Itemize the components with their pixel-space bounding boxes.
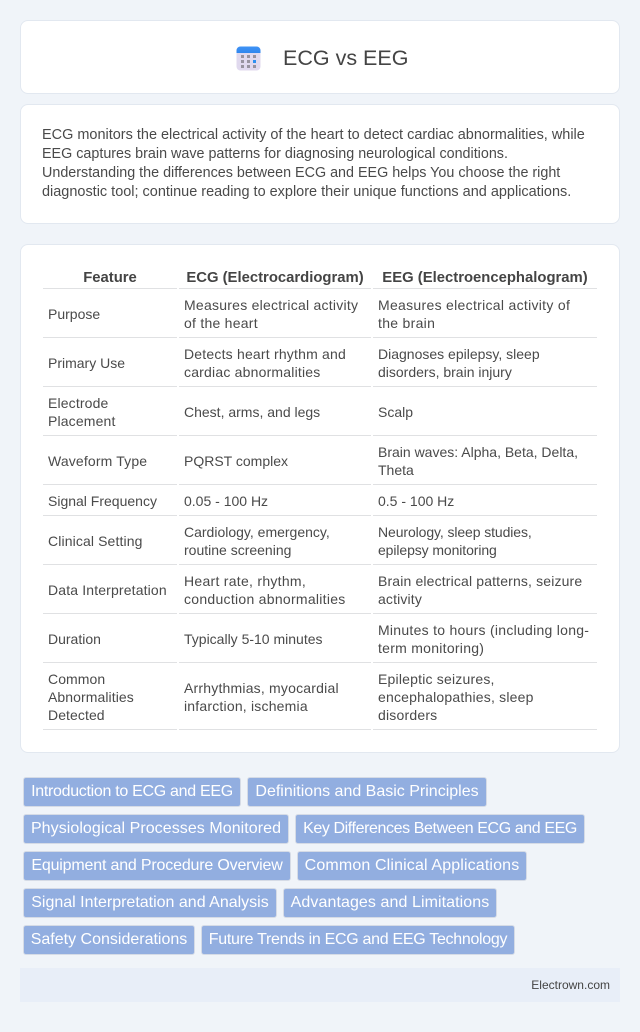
tag: Safety Considerations (31, 931, 187, 948)
comparison table card (20, 244, 620, 753)
row: common abnormalities: encephalopathies, sleep (378, 689, 534, 705)
tag (23, 925, 195, 955)
tag (23, 888, 277, 918)
row: purpose: Purpose (48, 306, 100, 322)
row: duration: Typically 5-10 minutes (184, 631, 323, 647)
row: primary use: Diagnoses epilepsy, sleep (378, 346, 540, 362)
intro card (20, 104, 620, 224)
table header: EEG (Electroencephalogram) (382, 270, 588, 286)
row: purpose: of the heart (184, 315, 258, 331)
row: common abnormalities: Arrhythmias, myocardial (184, 680, 339, 696)
tag: Definitions and Basic Principles (255, 783, 479, 800)
row: clinical setting: Clinical Setting (48, 533, 143, 549)
row: data interpretation: Data Interpretation (48, 582, 167, 598)
row: waveform type: Theta (378, 462, 414, 478)
intro text: ECG monitors the electrical activity of the heart to detect cardiac abnormalities, while (42, 127, 585, 143)
row: primary use: cardiac abnormalities (184, 364, 320, 380)
row: common abnormalities: Abnormalities (48, 689, 134, 705)
row: purpose: the brain (378, 315, 435, 331)
row: primary use: Primary Use (48, 355, 125, 371)
table header: Feature (83, 270, 137, 286)
row: waveform type: PQRST complex (184, 453, 288, 469)
row: electrode placement: Scalp (378, 404, 413, 420)
tag: Key Differences Between ECG and EEG (303, 820, 577, 837)
row: electrode placement: Chest, arms, and legs (184, 404, 320, 420)
row: purpose: Measures electrical activity of (378, 297, 570, 313)
row: signal frequency: 0.5 - 100 Hz (378, 493, 454, 509)
row: duration: Duration (48, 631, 101, 647)
row: waveform type (48, 444, 578, 478)
footer credit: Electrown.com (531, 978, 610, 992)
row: clinical setting: routine screening (184, 542, 291, 558)
title card (20, 20, 620, 94)
row: signal frequency: 0.05 - 100 Hz (184, 493, 268, 509)
row: clinical setting: Cardiology, emergency, (184, 524, 330, 540)
tag (283, 888, 497, 918)
row: clinical setting: Neurology, sleep studies, (378, 524, 532, 540)
tag: Physiological Processes Monitored (31, 820, 281, 837)
row: clinical setting (48, 524, 532, 558)
tag: Common Clinical Applications (305, 857, 519, 874)
row: purpose (48, 297, 570, 331)
tag (295, 814, 585, 844)
row: electrode placement (48, 395, 413, 429)
footer (20, 968, 620, 1002)
tag (23, 777, 241, 807)
row: signal frequency: Signal Frequency (48, 493, 157, 509)
tag (247, 777, 487, 807)
row: waveform type: Waveform Type (48, 453, 147, 469)
row: data interpretation (48, 573, 582, 607)
row: data interpretation: Heart rate, rhythm, (184, 573, 306, 589)
tag (23, 851, 291, 881)
tag: Introduction to ECG and EEG (31, 783, 233, 800)
row: common abnormalities: Detected (48, 707, 105, 723)
tag (23, 814, 289, 844)
table header: ECG (Electrocardiogram) (186, 270, 364, 286)
row: duration: term monitoring) (378, 640, 484, 656)
tag (201, 925, 515, 955)
row: duration (48, 622, 589, 656)
intro text (42, 127, 585, 200)
topic tags (23, 777, 585, 955)
row: electrode placement: Electrode (48, 395, 108, 411)
row: common abnormalities (48, 671, 534, 723)
row: primary use: Detects heart rhythm and (184, 346, 346, 362)
row: waveform type: Brain waves: Alpha, Beta, Delta, (378, 444, 578, 460)
row: primary use: disorders, brain injury (378, 364, 512, 380)
row: clinical setting: epilepsy monitoring (378, 542, 497, 558)
row: duration: Minutes to hours (including long- (378, 622, 589, 638)
row: common abnormalities: Common (48, 671, 105, 687)
row: data interpretation: conduction abnormalities (184, 591, 346, 607)
row: data interpretation: activity (378, 591, 422, 607)
row: primary use (48, 346, 540, 380)
row: data interpretation: Brain electrical patterns, seizure (378, 573, 582, 589)
row: common abnormalities: disorders (378, 707, 437, 723)
row: common abnormalities: infarction, ischemia (184, 698, 308, 714)
tag: Equipment and Procedure Overview (31, 857, 283, 874)
title: ECG vs EEG (283, 46, 408, 70)
icon: calendar (236, 46, 260, 70)
row: common abnormalities: Epileptic seizures, (378, 671, 495, 687)
tag (297, 851, 527, 881)
row: electrode placement: Placement (48, 413, 116, 429)
intro text: diagnostic tool; continue reading to explore their unique functions and applications. (42, 184, 571, 200)
tag: Signal Interpretation and Analysis (31, 894, 269, 911)
tag: Future Trends in ECG and EEG Technology (209, 931, 507, 948)
row: purpose: Measures electrical activity (184, 297, 358, 313)
intro text: Understanding the differences between ECG and EEG helps You choose the right (42, 165, 560, 181)
row: signal frequency (48, 493, 454, 509)
tag: Advantages and Limitations (291, 894, 489, 911)
intro text: EEG captures brain wave patterns for diagnosing neurological conditions. (42, 146, 508, 162)
table header (83, 270, 588, 286)
